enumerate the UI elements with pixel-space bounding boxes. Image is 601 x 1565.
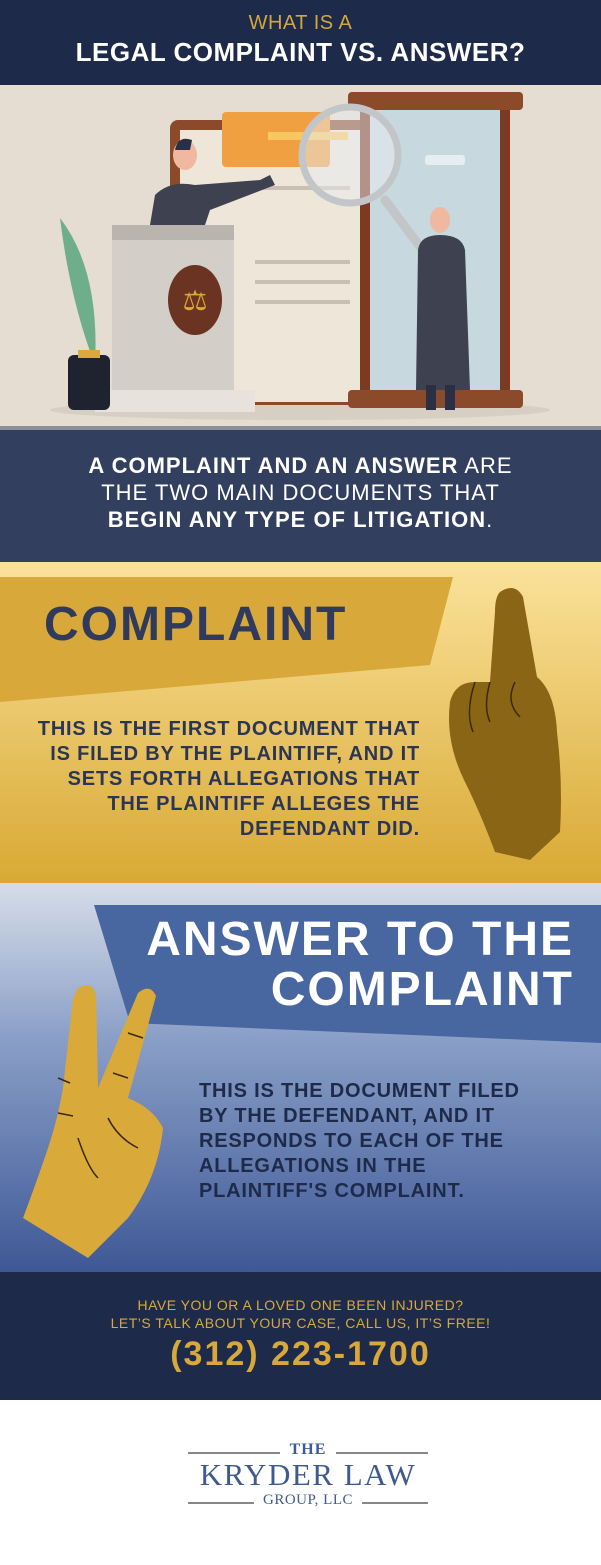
answer text (199, 1080, 520, 1202)
answer banner (94, 905, 601, 1043)
answer heading: ANSWER TO THE (146, 913, 574, 966)
answer heading: COMPLAINT (271, 963, 574, 1016)
logo: GROUP, LLC (263, 1492, 353, 1508)
icon: lawyer man (150, 139, 275, 225)
complaint heading: COMPLAINT (44, 598, 347, 651)
icon: magnifier (302, 107, 460, 300)
illustration (0, 85, 601, 430)
icon: lawyer woman (416, 207, 470, 410)
panel: complaint (0, 562, 601, 883)
complaint text: THE PLAINTIFF ALLEGES THE (107, 793, 420, 815)
cta text (111, 1297, 490, 1331)
answer text: RESPONDS TO EACH OF THE (199, 1130, 504, 1152)
complaint text: THIS IS THE FIRST DOCUMENT THAT (38, 718, 420, 740)
answer heading (146, 913, 574, 1016)
icon: podium (95, 225, 255, 412)
icon: peace hand (23, 985, 163, 1258)
complaint text: SETS FORTH ALLEGATIONS THAT (68, 768, 420, 790)
icon: hourglass (348, 92, 523, 408)
panel: answer (0, 883, 601, 1272)
intro text block (0, 430, 601, 562)
intro text block: THE TWO MAIN DOCUMENTS THAT (101, 480, 500, 505)
intro text block: BEGIN ANY TYPE OF LITIGATION. (108, 507, 493, 532)
icon: quill and ink (60, 218, 110, 410)
title line 1: WHAT IS A (249, 12, 352, 34)
complaint text: IS FILED BY THE PLAINTIFF, AND IT (50, 743, 420, 765)
phone number: (312) 223-1700 (170, 1335, 431, 1373)
complaint text: DEFENDANT DID. (240, 818, 420, 840)
logo: THE (290, 1441, 326, 1458)
icon: document (170, 112, 370, 405)
title line 2: LEGAL COMPLAINT VS. ANSWER? (76, 37, 525, 67)
header (0, 0, 601, 85)
answer text: PLAINTIFF'S COMPLAINT. (199, 1180, 465, 1202)
logo: KRYDER LAW (200, 1457, 416, 1492)
logo (188, 1441, 428, 1508)
cta text: LET’S TALK ABOUT YOUR CASE, CALL US, IT’S FREE! (111, 1315, 490, 1331)
intro text block: A COMPLAINT AND AN ANSWER ARE (88, 453, 513, 478)
answer text: THIS IS THE DOCUMENT FILED (199, 1080, 520, 1102)
icon: podium: ⚖ (182, 285, 208, 316)
icon: pointing hand (449, 588, 561, 860)
cta text: HAVE YOU OR A LOVED ONE BEEN INJURED? (137, 1297, 464, 1313)
answer text: BY THE DEFENDANT, AND IT (199, 1105, 495, 1127)
complaint text (38, 718, 420, 840)
footer call to action (0, 1272, 601, 1400)
answer text: ALLEGATIONS IN THE (199, 1155, 426, 1177)
complaint banner (0, 577, 453, 702)
